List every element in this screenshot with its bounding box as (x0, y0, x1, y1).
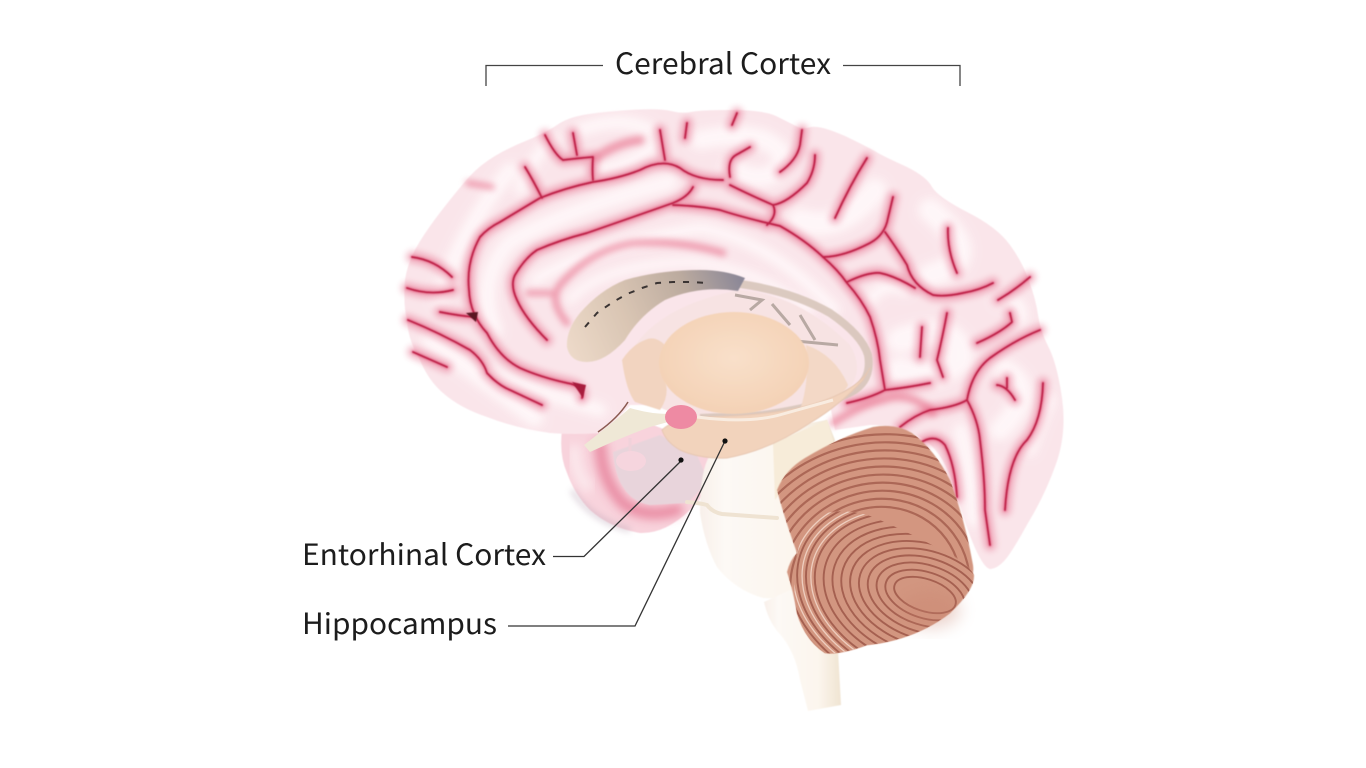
leader: entorhinal cortex (553, 457, 684, 556)
lower lobe (794, 511, 975, 654)
frontal lobe medial edge (598, 402, 628, 432)
peach structures left of thalamus (622, 338, 667, 410)
label: hippocampus: Hippocampus (302, 601, 497, 643)
soft inner fold shading (468, 140, 933, 423)
dark sulcus pits (466, 312, 586, 398)
label: entorhinal cortex: Entorhinal Cortex (302, 532, 546, 574)
gyrus highlights (430, 122, 1050, 520)
cerebral cortex (404, 109, 1064, 569)
heading: cerebral cortex: Cerebral Cortex (615, 41, 831, 83)
sulci mid tone (407, 113, 1043, 545)
cranial nerve (687, 502, 777, 518)
temporal lobe (561, 420, 718, 533)
caudate body (567, 270, 745, 362)
upper lobe (776, 425, 974, 654)
brain illustration (398, 104, 1064, 710)
corpus callosum band (700, 283, 869, 418)
bracket: cerebral cortex (486, 66, 960, 86)
pale band under callosum (630, 290, 857, 420)
medial structures (567, 270, 870, 471)
leader: hippocampus (508, 438, 728, 626)
pons and midbrain (700, 420, 835, 600)
optic tract (584, 408, 668, 452)
crescent right of thalamus (800, 345, 848, 410)
medulla and spinal cord (764, 590, 841, 711)
upper midbrain (773, 420, 840, 500)
brainstem (687, 420, 841, 711)
sulci crisp lines (407, 113, 1043, 545)
hippocampus (662, 368, 870, 458)
pineal pink body (665, 405, 697, 429)
lateral ventricle struts (735, 295, 838, 345)
sulci soft halo (407, 113, 1043, 545)
hippocampal band (697, 400, 833, 420)
thalamus (659, 312, 809, 414)
pituitary gland (616, 438, 646, 471)
cerebellum (776, 425, 975, 654)
